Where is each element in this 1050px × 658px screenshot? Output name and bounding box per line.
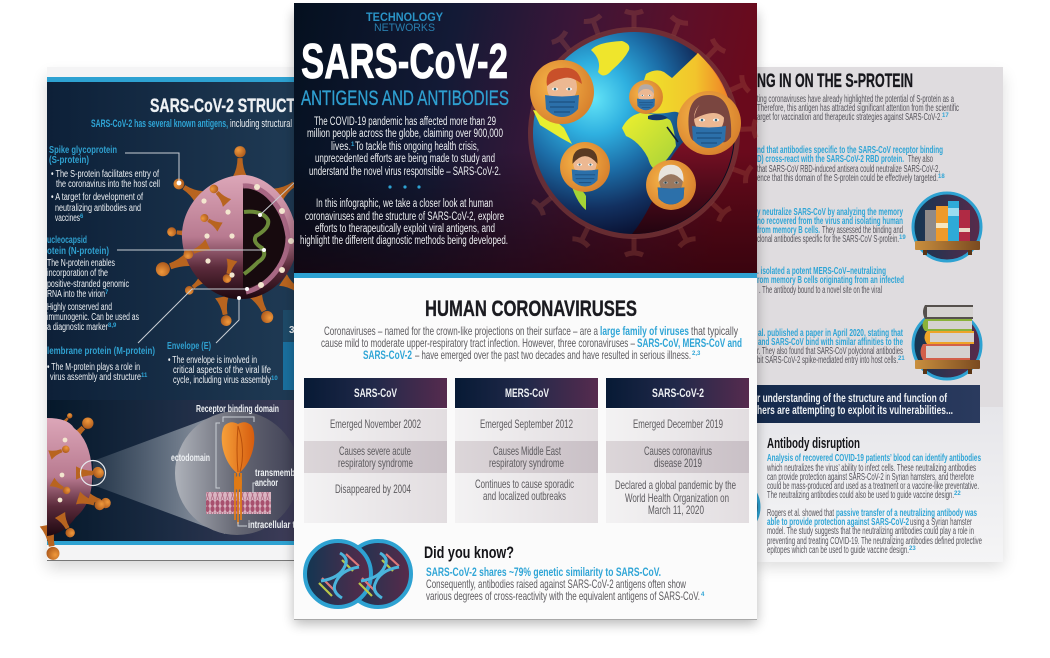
second paragraph: coronaviruses and the structure of SARS-CoV-2, explore [305, 211, 504, 223]
did you know text: Did you know? [424, 543, 514, 562]
text block: MERS-CoV antibody: rom memory B cells originating from an infected [757, 275, 904, 286]
table column: SARS-CoV-2: March 11, 2020 [648, 503, 704, 517]
text block: spike glycoprotein: 6 [80, 214, 84, 220]
table column: SARS-CoV-2: Causes coronavirus [644, 444, 712, 458]
did you know text: SARS-CoV-2 shares ~79% genetic similarity to SARS-CoV. [426, 565, 661, 579]
did you know text: various degrees of cross-reactivity with the equivalent antigens of SARS-CoV. [426, 589, 700, 603]
intro paragraph: lives. [331, 141, 351, 153]
heading: human coronaviruses: HUMAN CORONAVIRUSES [425, 296, 637, 321]
text block: April 2020 paper [757, 328, 905, 366]
face: red hair [530, 60, 594, 124]
text block: antibody disruption: able to provide protection against SARS-CoV-2 [767, 517, 909, 528]
illustration: spike protein magnified [93, 411, 299, 535]
did you know text [424, 543, 705, 603]
intro paragraph: To tackle this ongoing health crisis, [355, 141, 479, 153]
logo: TECHNOLOGY [366, 12, 443, 24]
text block: nucleocapsid: 7 [105, 290, 109, 296]
text block: spike glycoprotein: • A target for development of [51, 192, 143, 203]
illustration: coronavirus cutaway [153, 146, 311, 327]
table column: MERS-CoV: respiratory syndrome [489, 456, 564, 470]
text block: intro: 17 [942, 113, 949, 119]
logo: NETWORKS [374, 22, 435, 34]
connector: N-protein [117, 248, 266, 252]
text block: nucleocapsid: immunogenic. Can be used as [47, 312, 139, 323]
label: ectodomain: ectodomain [171, 453, 210, 464]
text block: spike glycoprotein: the coronavirus into the host cell [56, 179, 160, 190]
table column: MERS-CoV: Continues to cause sporadic [475, 477, 574, 491]
hero banner [294, 3, 757, 278]
text block: RBD cross-reaction: nd that antibodies specific to the SARS-CoV receptor binding [757, 145, 943, 156]
text block: membrane protein: • The M-protein plays a role in [47, 362, 140, 373]
text block: memory B cells: They assessed the binding and [822, 225, 903, 236]
second paragraph: efforts to therapeutically exploit viral antigens, and [315, 223, 495, 235]
text block: antibody disruption: epitopes which can be used to guide vaccine design. [767, 545, 909, 556]
text block: April 2020 paper: r. They also found that SARS-CoV polyclonal antibodies [757, 346, 903, 357]
text block: April 2020 paper: bit SARS-CoV-2 spike-mediated entry into host cells. [757, 355, 898, 366]
icon: DNA pair [305, 541, 411, 607]
subheading: known antigens: SARS-CoV-2 has several known antigens, [91, 118, 228, 130]
heading: S-protein: NG IN ON THE S-PROTEIN [757, 71, 913, 92]
text block: RBD cross-reaction: D) cross-react with the SARS-CoV-2 RBD protein. [757, 154, 904, 165]
label: transmembrane anchor [255, 468, 295, 489]
table column: SARS-CoV: respiratory syndrome [338, 456, 413, 470]
text block: memory B cells [757, 207, 906, 245]
text block: envelope: • The envelope is involved in [168, 355, 257, 366]
intro paragraph [307, 116, 503, 178]
logo [366, 12, 443, 34]
text block: coronaviruses intro: that typically [691, 324, 738, 338]
intro paragraph: The COVID-19 pandemic has affected more than 29 [314, 116, 496, 128]
text block: envelope [167, 340, 278, 386]
second paragraph: highlight the different diagnostic methods being developed. [300, 235, 508, 247]
text block: coronaviruses intro [321, 324, 742, 362]
text block: nucleocapsid [47, 234, 139, 333]
table column: SARS-CoV [304, 378, 447, 523]
text block: nucleocapsid: ucleocapsid [47, 234, 87, 246]
callout box clipped: 3 [289, 325, 295, 336]
label: receptor binding domain: Receptor binding domain [196, 404, 279, 415]
text block: memory B cells: from memory B cells. [757, 225, 820, 236]
panel: right page S-protein [701, 67, 1003, 567]
illustration: virus detail [40, 411, 113, 561]
text block: memory B cells: y neutralize SARS-CoV by analyzing the memory [757, 207, 903, 218]
text block: coronaviruses intro: cause mild to moderate upper-respiratory tract infection. However, three coronaviruses – [321, 336, 635, 350]
text block: spike glycoprotein [49, 144, 160, 224]
table column: SARS-CoV-2: World Health Organization on [625, 491, 729, 505]
text block: spike glycoprotein: (S-protein) [49, 154, 89, 166]
text block: nucleocapsid: The N-protein enables [47, 258, 115, 269]
text block: membrane protein [47, 345, 155, 383]
subtitle: ANTIGENS AND ANTIBODIES [301, 87, 509, 110]
icon: partial ring [701, 478, 759, 536]
heading: structure: SARS-CoV-2 STRUCT [150, 96, 295, 117]
table column: SARS-CoV: Causes severe acute [339, 444, 411, 458]
text block: nucleocapsid: positive-stranded genomic [47, 279, 129, 290]
icon: books on shelf [913, 193, 981, 261]
table column: SARS-CoV-2: Emerged December 2019 [633, 417, 723, 431]
icon: stacked books [913, 305, 981, 379]
text block: RBD cross-reaction: They also [908, 154, 933, 165]
illustration: globe with virus spikes and masked faces [528, 11, 756, 255]
text block: spike glycoprotein: • The S-protein facilitates entry of [51, 169, 159, 180]
second paragraph: In this infographic, we take a closer look at human [316, 198, 493, 210]
text block: antibody disruption [766, 453, 982, 556]
table column: SARS-CoV-2: Declared a global pandemic by the [615, 478, 736, 492]
text block: membrane protein: lembrane protein (M-protein) [47, 345, 155, 357]
callout box clipped [283, 310, 295, 390]
connector: M-protein [138, 287, 249, 343]
text block: nucleocapsid: RNA into the virion [47, 289, 105, 300]
label: transmembrane anchor: anchor [255, 478, 278, 489]
table column: SARS-CoV-2: disease 2019 [654, 456, 702, 470]
panel: centre page [294, 3, 757, 624]
face: brown long hair [677, 91, 741, 155]
connector: envelope [216, 296, 241, 343]
text block: memory B cells: clonal antibodies specific for the SARS-CoV S-protein. [757, 234, 899, 245]
text block: antibody disruption: 23 [909, 546, 916, 552]
connector: S-protein [125, 153, 181, 185]
text block: nucleocapsid: 8,9 [108, 323, 117, 329]
label: intracellular tail: intracellular t [248, 520, 295, 531]
text block: intro [757, 94, 959, 123]
text block: MERS-CoV antibody [757, 266, 904, 296]
connector: RNA [258, 182, 295, 217]
table column: SARS-CoV-2: SARS-CoV-2 [652, 388, 704, 400]
text block: RBD cross-reaction: ence that this domain of the S-protein could be effectively targeted. [757, 173, 938, 184]
text block: antibody disruption: 22 [954, 491, 961, 497]
text block: MERS-CoV antibody: . The antibody bound to a novel site on the viral [759, 285, 882, 296]
table column: MERS-CoV: and localized outbreaks [483, 489, 566, 503]
intro paragraph: unprecedented efforts are being made to study and [315, 153, 495, 165]
text block: MERS-CoV antibody: . isolated a potent MERS-CoV–neutralizing [757, 266, 886, 277]
banner: vulnerabilities: hers are attempting to exploit its vulnerabilities... [757, 405, 953, 417]
text block: coronaviruses intro: 2,3 [692, 351, 701, 357]
table column: MERS-CoV: Causes Middle East [493, 444, 561, 458]
panel: left page structure [40, 67, 311, 568]
label: transmembrane anchor: transmemb [255, 468, 295, 479]
banner: vulnerabilities [757, 385, 980, 423]
text block: membrane protein: virus assembly and structure [50, 372, 141, 383]
text block: spike glycoprotein: vaccines [55, 213, 80, 224]
subheading: known antigens: including structural [230, 118, 292, 130]
face: grey hair [629, 80, 663, 114]
table column: SARS-CoV-2 [606, 378, 749, 523]
text block: spike glycoprotein: Spike glycoprotein [49, 144, 117, 156]
text block: coronaviruses intro: SARS-CoV, MERS-CoV and [637, 336, 742, 350]
text block: April 2020 paper: al. published a paper in April 2020, stating that [758, 328, 903, 339]
text block: membrane protein: 11 [141, 373, 148, 379]
text block: coronaviruses intro: Coronaviruses – named for the crown-like projections on their surface – are a [324, 324, 598, 338]
banner: vulnerabilities: r understanding of the structure and function of [757, 393, 947, 405]
table column: SARS-CoV: Emerged November 2002 [330, 417, 421, 431]
heading: antibody disruption: Antibody disruption [767, 436, 860, 452]
intro paragraph: million people across the globe, claiming over 900,000 [307, 128, 503, 140]
title: SARS-CoV-2 [301, 35, 508, 89]
did you know text: Consequently, antibodies raised against SARS-CoV-2 antigens often show [426, 577, 686, 591]
face: dark hair [560, 142, 610, 192]
intro paragraph: understand the novel virus responsible – SARS-CoV-2. [309, 166, 501, 178]
dots [388, 185, 421, 189]
text block: antibody disruption: using a Syrian hamster [910, 517, 972, 528]
face: white hair [646, 160, 696, 210]
text block: nucleocapsid: incorporation of the [47, 268, 108, 279]
text block: nucleocapsid: Highly conserved and [47, 302, 112, 313]
table column: MERS-CoV: Emerged September 2012 [480, 417, 573, 431]
text block: spike glycoprotein: neutralizing antibodies and [55, 203, 141, 214]
text block: antibody disruption: Rogers et al. showed that [767, 508, 834, 519]
text block: RBD cross-reaction: 18 [938, 174, 945, 180]
text block: envelope: Envelope (E) [167, 340, 211, 352]
intro paragraph: 1 [351, 142, 355, 148]
did you know text: 4 [701, 592, 705, 598]
text block: envelope: critical aspects of the viral life [173, 365, 271, 376]
text block: envelope: cycle, including virus assembly [173, 375, 271, 386]
text block: memory B cells: ho recovered from the virus and isolating human [757, 216, 903, 227]
table column: MERS-CoV [455, 378, 598, 523]
table column: MERS-CoV: MERS-CoV [505, 388, 549, 400]
text block: coronaviruses intro: – have emerged over the past two decades and have resulted in serious illness. [415, 348, 691, 362]
text block: April 2020 paper: 21 [898, 356, 905, 362]
table column: SARS-CoV: SARS-CoV [354, 388, 397, 400]
second paragraph [300, 198, 508, 247]
text block: RBD cross-reaction [757, 145, 945, 184]
text block: nucleocapsid: otein (N-protein) [47, 245, 109, 257]
text block: memory B cells: 19 [899, 235, 906, 241]
text block: April 2020 paper: and SARS-CoV bind with similar affinities to the [758, 337, 903, 348]
text block: coronaviruses intro: large family of viruses [600, 324, 689, 338]
table column: SARS-CoV: Disappeared by 2004 [335, 482, 411, 496]
text block: nucleocapsid: a diagnostic marker [47, 322, 108, 333]
text block: coronaviruses intro: SARS-CoV-2 [363, 348, 412, 362]
text block: envelope: 10 [271, 376, 278, 382]
